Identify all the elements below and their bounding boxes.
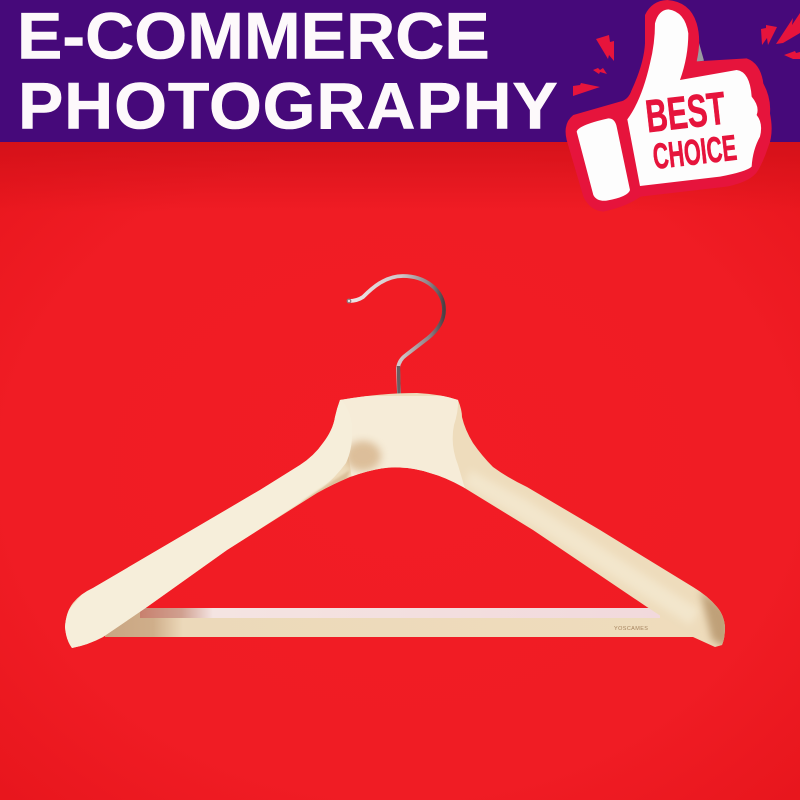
badge text: [643, 82, 739, 177]
thumb outline: [566, 0, 772, 212]
left arm: [60, 398, 352, 652]
title: PHOTOGRAPHY: [18, 69, 558, 143]
title: [17, 0, 558, 143]
thumb fist: [627, 9, 761, 186]
left arm lower shade: [300, 470, 350, 503]
hanger: [60, 276, 730, 652]
badge text: BEST: [643, 82, 728, 142]
centre block: [340, 396, 466, 492]
right arm highlight: [465, 470, 700, 625]
title: E-COMMERCE: [17, 0, 490, 73]
badge text: CHOICE: [651, 127, 739, 177]
thumb shadow: [695, 30, 704, 62]
burst rays: [573, 13, 800, 96]
thumb cuff: [577, 118, 630, 201]
hanger brand mark: YOSCAMES: [614, 626, 648, 632]
hanger crossbar: [105, 608, 705, 637]
right arm tip shade: [698, 592, 725, 646]
best choice badge: [566, 0, 800, 212]
wood grain patch: [345, 441, 381, 471]
header band: [0, 0, 800, 142]
hanger hook: [347, 276, 444, 394]
hanger body: [60, 390, 730, 652]
